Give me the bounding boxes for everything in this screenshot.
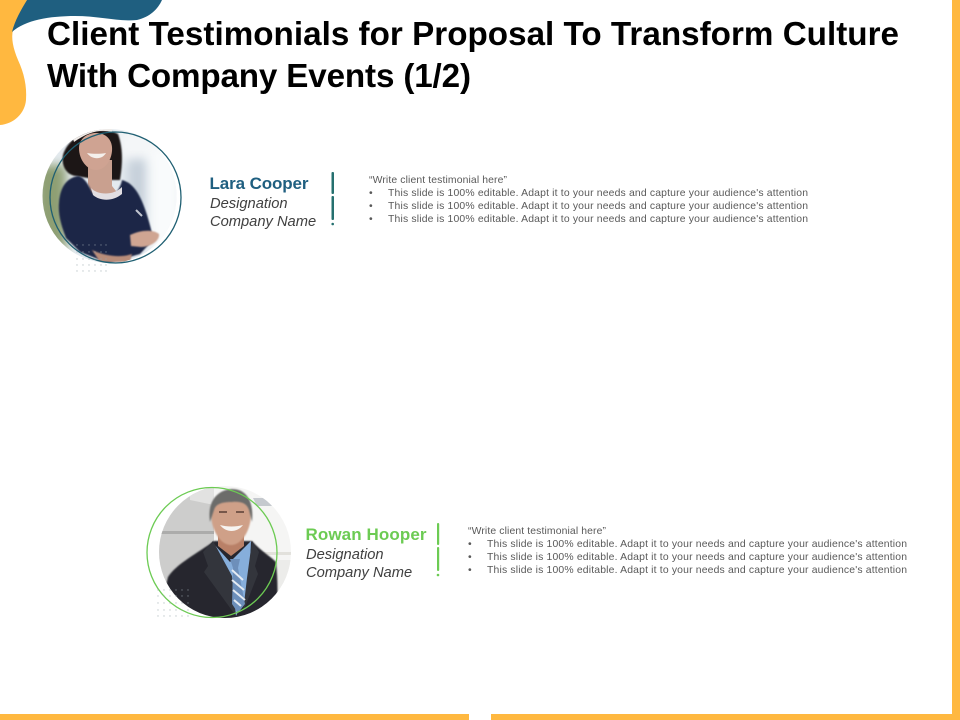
testimonial text (369, 175, 808, 225)
neck (218, 535, 244, 556)
collar (91, 187, 122, 200)
testimonial text: This slide is 100% editable. Adapt it to your needs and capture your audience's attention (388, 214, 808, 225)
testimonial 2: Rowan Hooper (147, 486, 907, 620)
testimonial text: • (369, 188, 373, 199)
face (79, 133, 112, 170)
arms (130, 231, 159, 247)
hair (63, 130, 122, 180)
testimonial text: This slide is 100% editable. Adapt it to your needs and capture your audience's attention (487, 552, 907, 563)
testimonial text: This slide is 100% editable. Adapt it to your needs and capture your audience's attention (487, 565, 907, 576)
tie (230, 559, 245, 613)
title: Client Testimonials for Proposal To Transform Culture (47, 16, 899, 53)
photo: Lara Cooper portrait (42, 129, 176, 263)
title: With Company Events (1/2) (47, 58, 471, 95)
photo: Rowan Hooper portrait (158, 486, 293, 620)
testimonial text (468, 526, 907, 576)
head (211, 500, 252, 546)
title (47, 16, 899, 95)
name and role: Company Name (210, 214, 316, 230)
suit (165, 541, 278, 620)
shirt (213, 541, 251, 616)
testimonial text: “Write client testimonial here” (369, 175, 508, 186)
name and role (306, 525, 427, 581)
ring: green circle outline (147, 488, 277, 618)
neck (88, 160, 116, 194)
divider: teal exclamation bar (331, 172, 334, 225)
divider: green exclamation bar (437, 523, 439, 576)
testimonial text: • (468, 552, 472, 563)
decorative corner blob (0, 0, 162, 125)
name and role: Designation (306, 547, 384, 563)
testimonial text: • (369, 201, 373, 212)
name and role (210, 174, 316, 230)
testimonial text: • (468, 539, 472, 550)
dot pattern (76, 244, 107, 272)
name and role: Lara Cooper (210, 174, 309, 193)
lapels (203, 541, 259, 616)
testimonial text: This slide is 100% editable. Adapt it to your needs and capture your audience's attention (388, 201, 808, 212)
testimonial text: This slide is 100% editable. Adapt it to your needs and capture your audience's attention (487, 539, 907, 550)
testimonial 1: Lara Cooper (36, 128, 808, 272)
name and role: Designation (210, 196, 288, 212)
dot pattern (157, 589, 189, 617)
testimonial text: “Write client testimonial here” (468, 526, 607, 537)
hair (209, 489, 252, 522)
testimonial text: • (468, 565, 472, 576)
testimonial text: This slide is 100% editable. Adapt it to your needs and capture your audience's attention (388, 188, 808, 199)
jacket (59, 176, 153, 263)
name and role: Rowan Hooper (306, 525, 427, 544)
testimonial text: • (369, 214, 373, 225)
ring: teal circle outline (50, 132, 181, 263)
name and role: Company Name (306, 565, 412, 581)
